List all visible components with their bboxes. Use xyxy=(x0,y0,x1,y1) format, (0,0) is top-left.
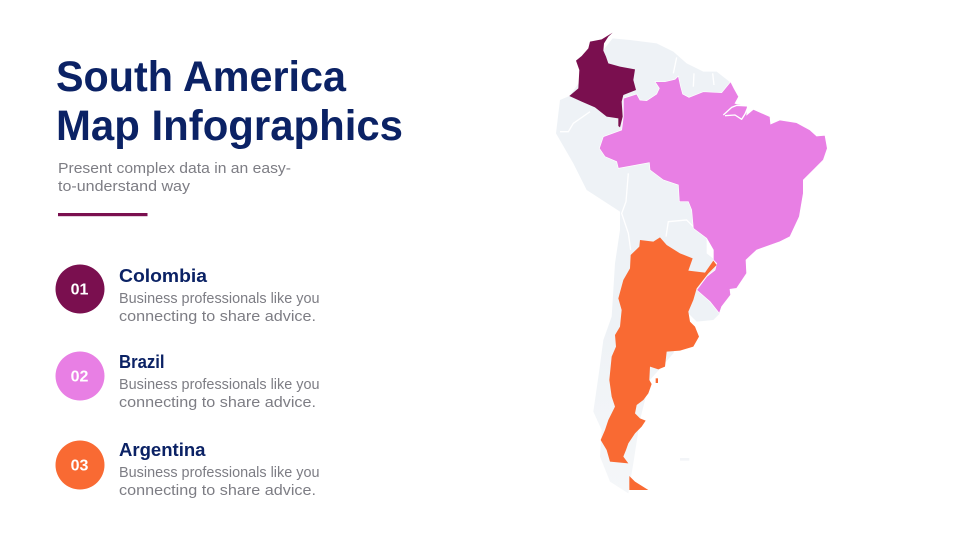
item 03: Argentina xyxy=(56,440,320,499)
subtitle: Present complex data in an easy- xyxy=(58,160,291,177)
country: Brazil xyxy=(599,76,827,313)
country: Colombia xyxy=(569,33,636,127)
title: South America xyxy=(56,53,347,101)
title xyxy=(56,53,403,150)
title: Map Infographics xyxy=(56,102,403,150)
subtitle: to-understand way xyxy=(58,178,191,195)
description 01: connecting to share advice. xyxy=(119,309,316,325)
item 02: Brazil xyxy=(56,352,320,411)
country: Argentina xyxy=(601,237,717,490)
accent rule xyxy=(58,213,148,216)
description 03 xyxy=(119,465,320,499)
heading: Colombia: Colombia xyxy=(119,266,208,286)
item 01: Colombia xyxy=(56,264,320,325)
badge 02: 02 xyxy=(71,368,88,386)
badge 03: 03 xyxy=(71,458,88,474)
map: South America xyxy=(556,33,827,493)
description 02: Business professionals like you xyxy=(119,377,320,393)
description 01: Business professionals like you xyxy=(119,291,320,307)
badge 03 xyxy=(56,440,104,490)
description 02 xyxy=(119,377,320,411)
description 03: Business professionals like you xyxy=(119,465,320,481)
other countries xyxy=(556,38,737,493)
subtitle xyxy=(58,160,291,195)
description 01 xyxy=(119,291,320,325)
badge 01 xyxy=(56,264,104,314)
badge 02 xyxy=(56,352,104,400)
heading: Argentina: Argentina xyxy=(119,440,207,460)
heading: Brazil: Brazil xyxy=(119,352,164,372)
badge 01: 01 xyxy=(71,282,88,298)
description 02: connecting to share advice. xyxy=(119,395,316,411)
description 03: connecting to share advice. xyxy=(119,483,316,499)
